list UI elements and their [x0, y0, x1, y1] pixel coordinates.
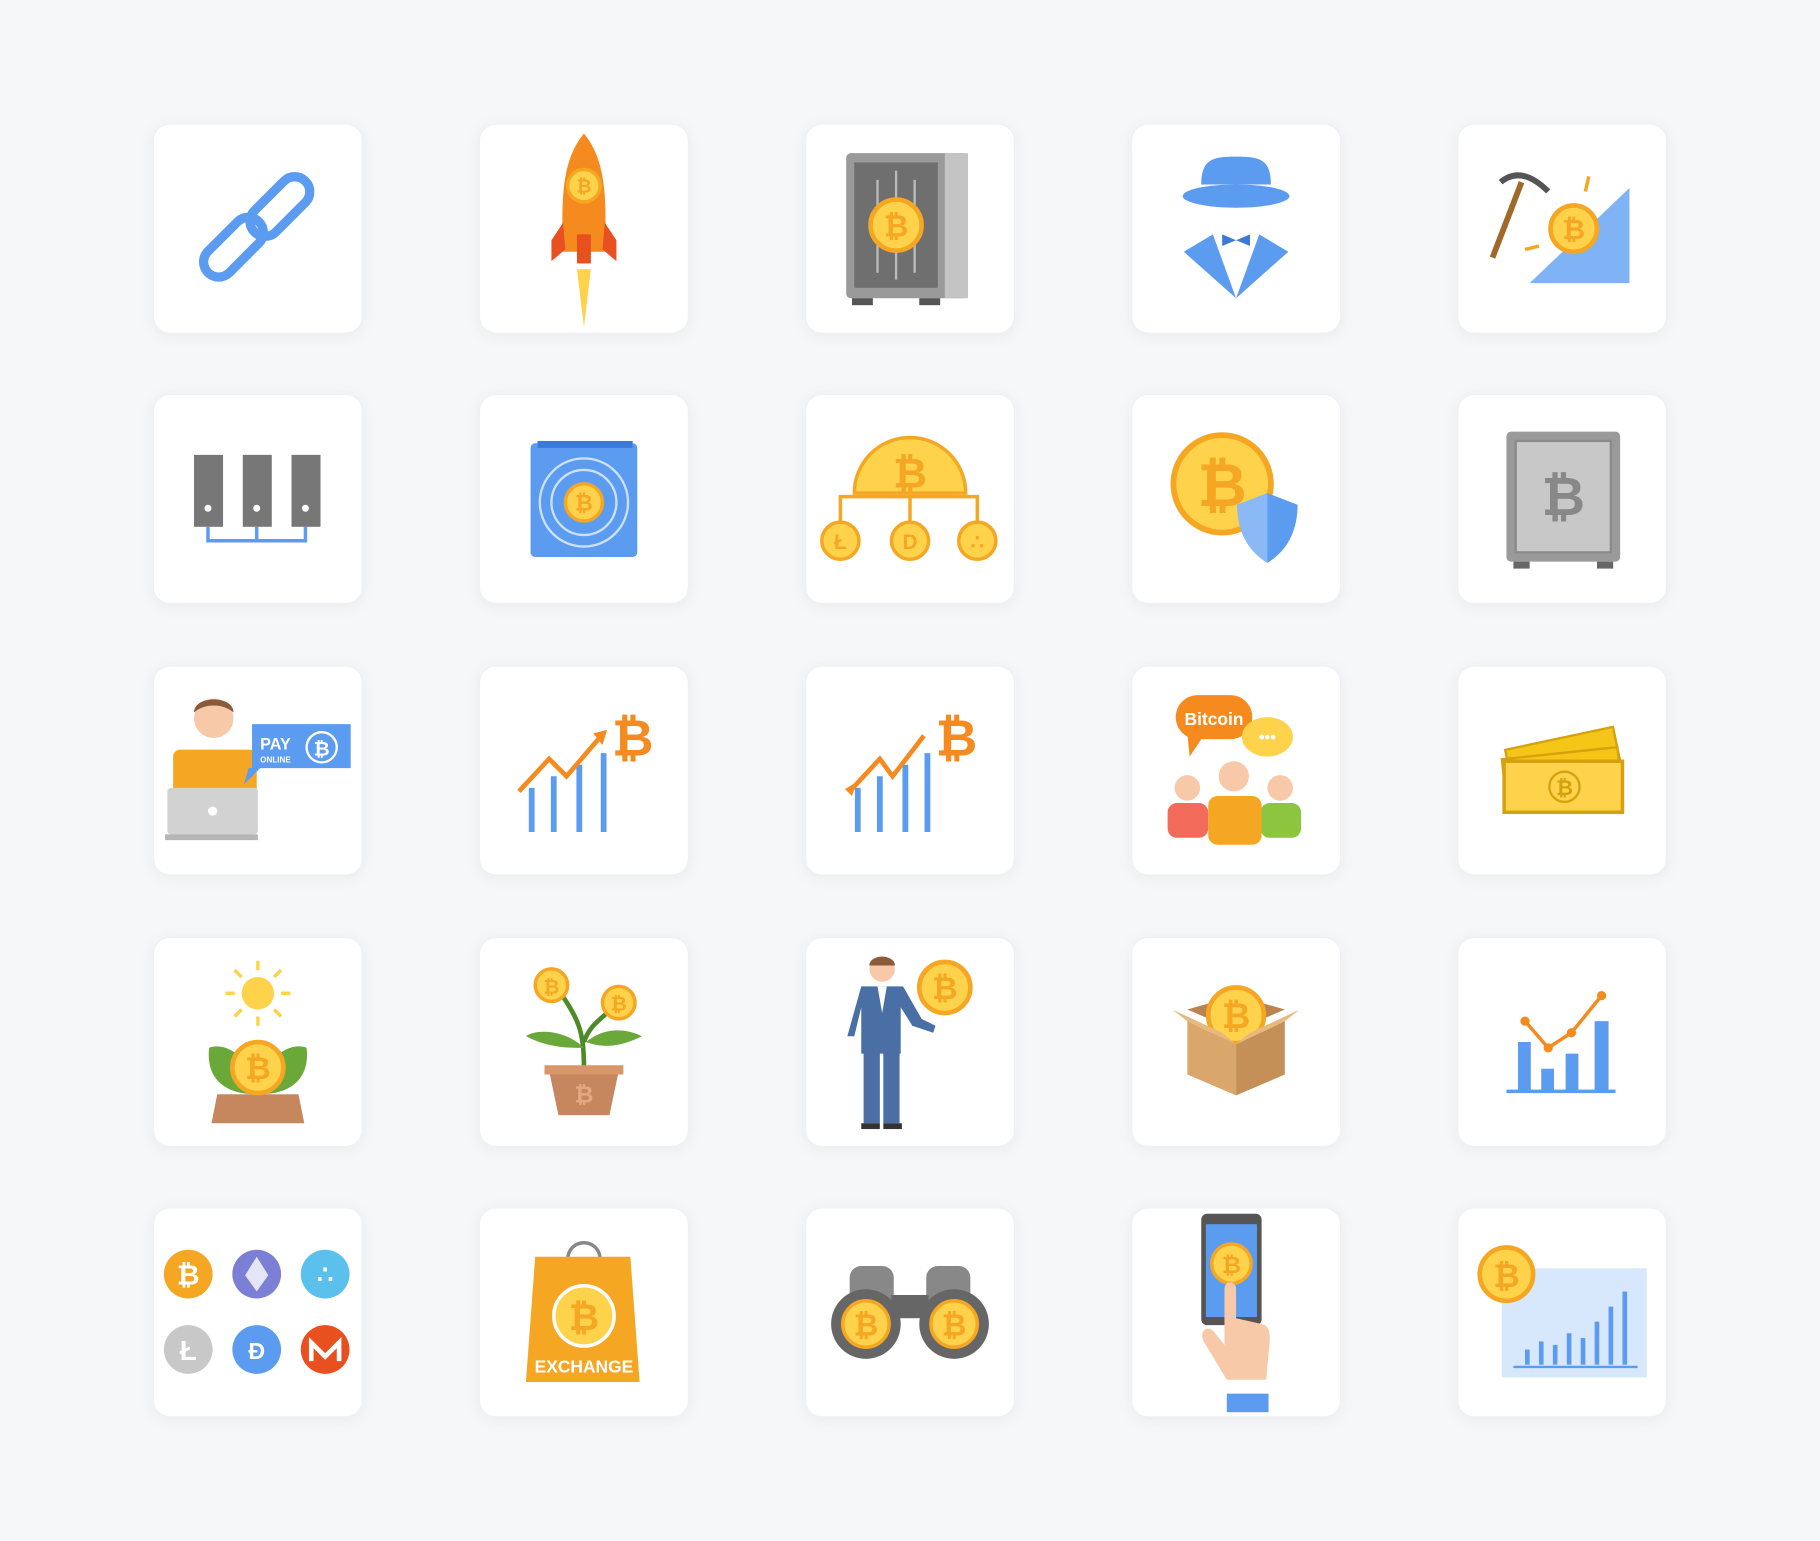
- icon: coin set: Ł: [180, 1335, 197, 1366]
- card: secure coin: [1132, 395, 1341, 603]
- icon: shopping bag: [526, 1243, 640, 1382]
- icon: coin hierarchy: D: [902, 531, 918, 554]
- card: exchange bag: [479, 1208, 688, 1417]
- icon: potted plant: ₿: [611, 994, 627, 1016]
- icon: phone and hand: [1201, 1214, 1270, 1412]
- icon: person with laptop: ₿: [314, 738, 330, 760]
- icon: shopping bag: ₿: [569, 1296, 599, 1338]
- icon: coin set: [164, 1250, 350, 1374]
- icon: coin hierarchy: [822, 437, 996, 559]
- card: bitcoin growth chart: [479, 666, 688, 875]
- icon: box with coin: [1172, 987, 1300, 1095]
- icon: asic: ₿: [575, 491, 593, 516]
- icon: growth chart: [519, 709, 653, 832]
- icon: chart report: [1480, 1247, 1647, 1377]
- icon: chart: [845, 709, 977, 832]
- icon: safe box: ₿: [1542, 468, 1585, 527]
- icon: money: [1502, 727, 1623, 812]
- icon: people chatting: [1168, 695, 1301, 845]
- icon: coin with shield: ₿: [1198, 451, 1247, 519]
- card: bitcoin drop chart: [806, 666, 1014, 875]
- icon: bar chart with trend: [1506, 991, 1616, 1093]
- icon: person with laptop: ONLINE: [260, 755, 291, 764]
- icon: coin set: Đ: [248, 1338, 265, 1364]
- card: money plant: [479, 938, 688, 1146]
- icon: phone and hand: ₿: [1222, 1252, 1241, 1278]
- icon: growth chart: ₿: [612, 709, 653, 766]
- icon: sun and sprout: ₿: [245, 1051, 271, 1086]
- card: banknotes: [1458, 666, 1667, 875]
- card: crypto tree: [806, 395, 1014, 603]
- icon: binoculars: ₿: [942, 1310, 966, 1343]
- icon: chart: ₿: [936, 709, 977, 766]
- card: box: [1132, 938, 1341, 1146]
- card: bar chart: [1458, 938, 1667, 1146]
- icon: coin hierarchy: ∴: [971, 531, 984, 554]
- card: cryptocurrencies: [153, 1208, 362, 1417]
- card: mining: [1458, 124, 1667, 333]
- icon: hat and suit: [1183, 157, 1289, 298]
- card: coin report: [1458, 1208, 1667, 1417]
- icon: potted plant: [526, 969, 642, 1115]
- icon: rocket: [551, 133, 616, 327]
- icon: pickaxe and hill: [1493, 175, 1629, 283]
- icon: person with laptop: PAY: [260, 736, 291, 754]
- card: safe: [1458, 395, 1667, 603]
- icon: businessman with coin: [847, 956, 970, 1129]
- icon: sun and sprout: [209, 961, 307, 1123]
- icon: coin hierarchy: Ł: [834, 531, 847, 554]
- card: miner fan: [479, 395, 688, 603]
- icon: people chatting: Bitcoin: [1185, 709, 1243, 729]
- card: businessman: [806, 938, 1014, 1146]
- icon: person with laptop: [165, 699, 351, 840]
- icon: shopping bag: EXCHANGE: [535, 1357, 633, 1377]
- icon: people chatting: •••: [1259, 729, 1276, 747]
- icon: coin set: ∴: [317, 1261, 333, 1289]
- card: mobile payment: [1132, 1208, 1341, 1417]
- icon: coin set: ₿: [177, 1260, 200, 1291]
- card: binoculars: [806, 1208, 1014, 1417]
- card: servers: [153, 395, 362, 603]
- icon: pickaxe and hill: ₿: [1562, 214, 1585, 245]
- icon: chart report: ₿: [1493, 1258, 1520, 1294]
- card: anonymous: [1132, 124, 1341, 333]
- icon: safe: [846, 153, 968, 305]
- icon: potted plant: ₿: [543, 976, 559, 998]
- card: vault: [806, 124, 1014, 333]
- card: bitcoin growth plant: [153, 938, 362, 1146]
- card: rocket: [479, 124, 688, 333]
- icon: money: ₿: [1556, 777, 1573, 800]
- icon: rocket: ₿: [576, 176, 591, 197]
- icon: safe box: [1506, 432, 1620, 569]
- icon: potted plant: ₿: [574, 1081, 593, 1107]
- icon: box with coin: ₿: [1222, 997, 1250, 1036]
- icon: coin with shield: [1173, 435, 1298, 563]
- card: bitcoin community: [1132, 666, 1341, 875]
- card: pay online: [153, 666, 362, 875]
- icon: coin hierarchy: ₿: [893, 449, 927, 496]
- icon: link: [197, 170, 316, 283]
- icon: binoculars: ₿: [854, 1310, 878, 1343]
- icon: safe: ₿: [884, 211, 908, 244]
- icon: asic: [531, 441, 637, 557]
- icon: servers: [194, 455, 321, 541]
- card: chain link: [153, 124, 362, 333]
- icon: businessman with coin: ₿: [932, 971, 958, 1006]
- icon: binoculars: [831, 1266, 989, 1359]
